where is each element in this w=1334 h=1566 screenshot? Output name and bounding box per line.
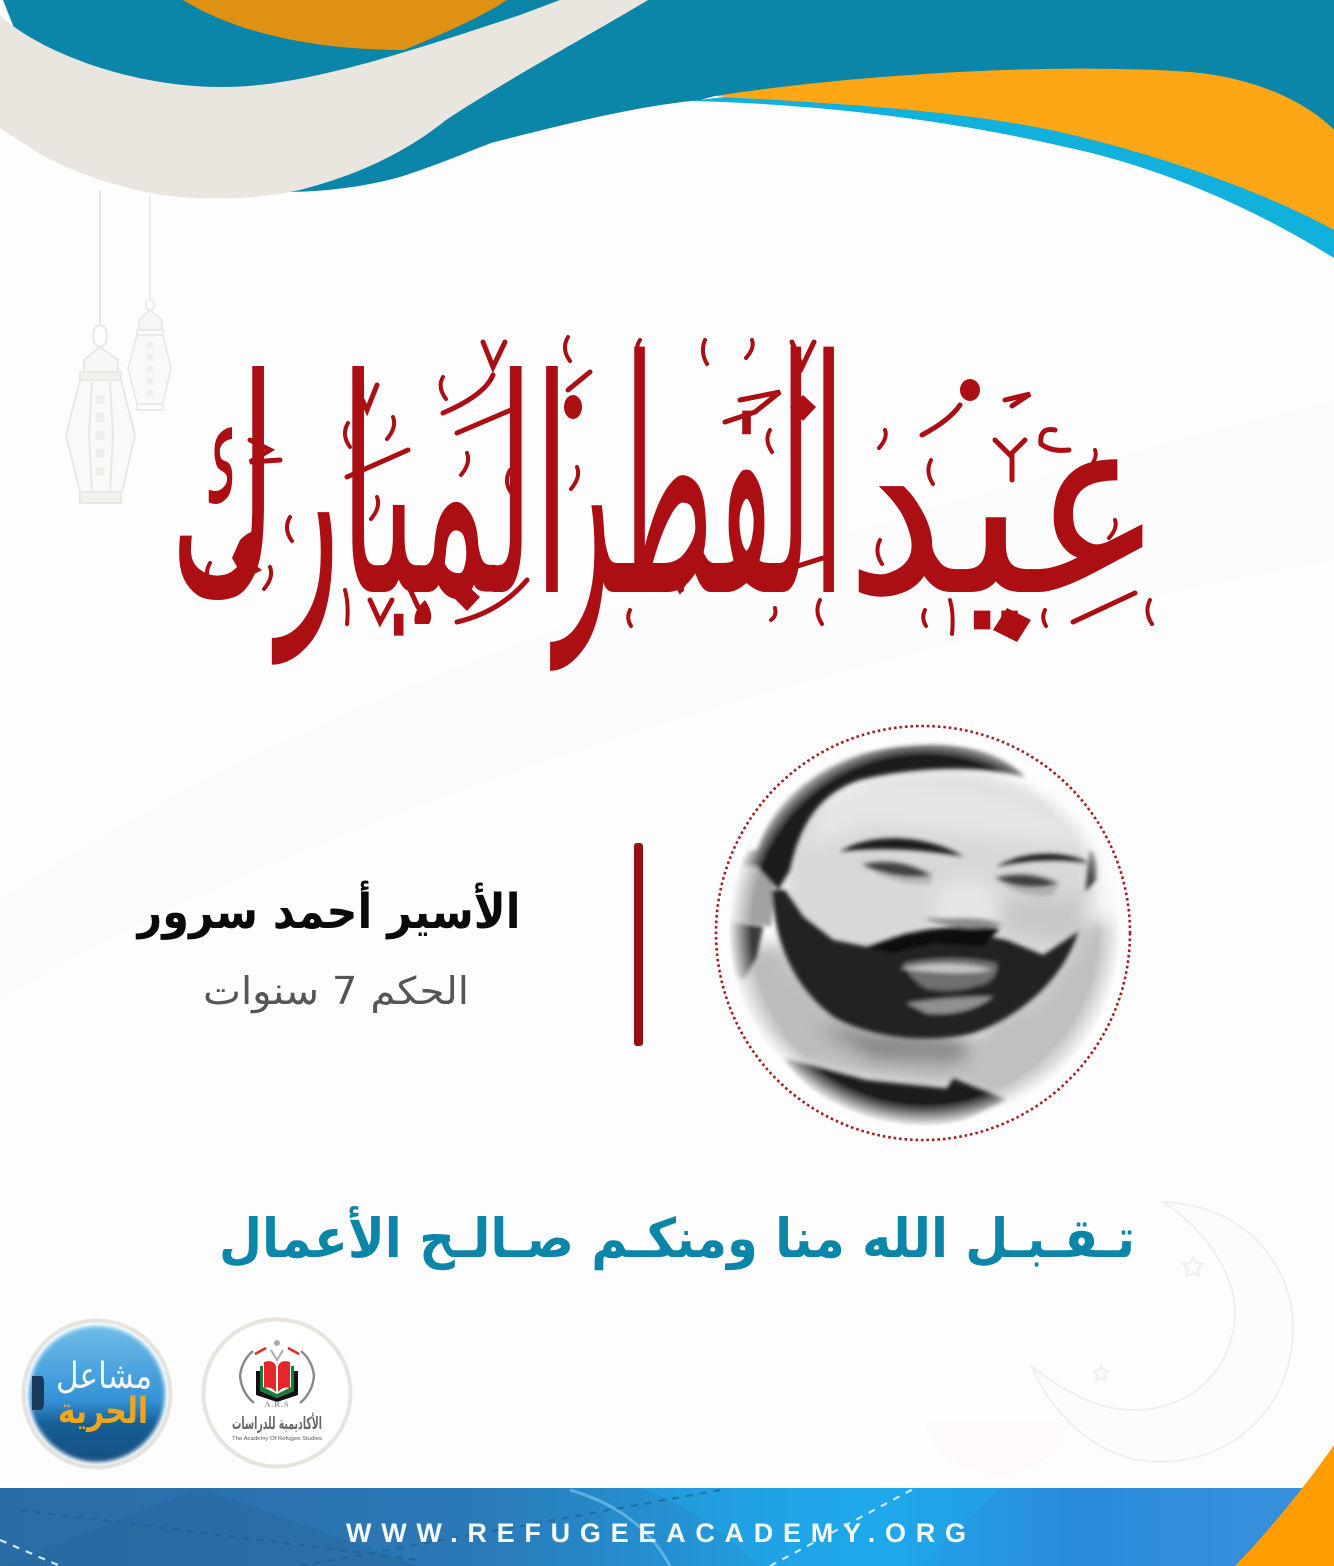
teal wave	[3, 0, 1334, 192]
logo book	[240, 1340, 314, 1403]
title word: Fitr: الفطر	[549, 292, 845, 673]
shirt	[784, 1056, 1007, 1126]
title word: Eid: عيد	[845, 357, 1165, 653]
mustache	[870, 927, 1000, 953]
orange swoosh	[715, 69, 1334, 240]
top wave banner	[0, 0, 1334, 258]
calligraphy dots	[226, 379, 1031, 642]
nose shadow	[923, 918, 1003, 928]
calligraphy ornament marks	[207, 337, 1152, 634]
amber arc	[183, 0, 507, 50]
logo: Academy of Refugee Studies	[204, 1320, 350, 1466]
faint pink shape	[925, 1423, 1070, 1475]
cream swoosh	[0, 0, 648, 199]
ear	[731, 866, 778, 929]
footer corner	[1235, 1445, 1334, 1566]
crescent moon watermark	[1032, 1202, 1293, 1462]
sentence text: الحكم 7 سنوات	[203, 969, 469, 1014]
divider bar	[634, 843, 643, 1046]
logo: Mashaeel Al-Hurriya	[24, 1320, 170, 1468]
prisoner name: الأسير أحمد سرور	[136, 880, 521, 940]
portrait photo	[730, 742, 1118, 1126]
logo text: Arabic name: الأكاديمية للدراسات	[232, 1413, 322, 1434]
title word: Mubarak: المبارك	[170, 317, 570, 664]
eyes	[863, 862, 930, 876]
footer band	[0, 1445, 1334, 1566]
beard	[772, 890, 1078, 1039]
logo text: English name: The Academy Of Refugee Studies	[232, 1436, 322, 1442]
lantern: small	[128, 196, 171, 410]
lantern: large	[66, 190, 135, 503]
cyan swoosh	[690, 97, 1334, 258]
logo text: white: مشاعل	[56, 1356, 152, 1397]
logo text: A.R.S: A.R.S	[264, 1400, 290, 1409]
website url: WWW.REFUGEEACADEMY.ORG	[346, 1518, 966, 1548]
logo text: orange: الحرية	[58, 1391, 148, 1432]
greeting line: تـقـبـل الله منا ومنكـم صـالـح الأعمال	[219, 1206, 1135, 1270]
portrait soft tones	[720, 770, 1130, 1110]
hair	[720, 743, 1025, 890]
title calligraphy	[170, 292, 1165, 673]
portrait frame	[716, 726, 1130, 1140]
eyebrows	[840, 838, 963, 857]
